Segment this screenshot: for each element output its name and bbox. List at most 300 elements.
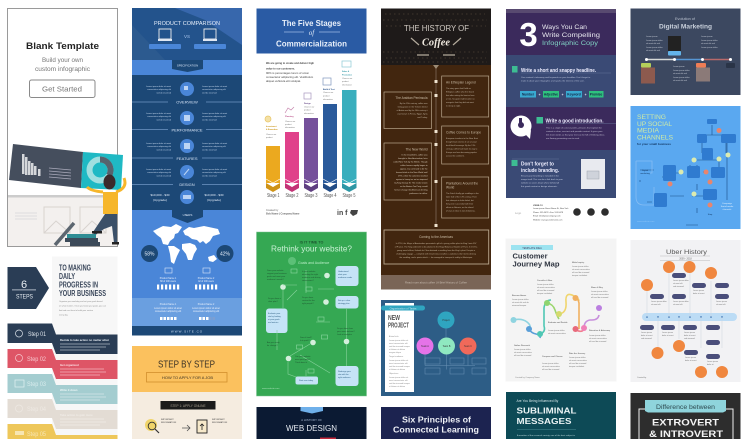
heading: customer journey map <box>512 254 560 268</box>
item 1: Number <box>522 92 535 96</box>
box: the new world: by King George III. The revolt, known <box>395 182 428 184</box>
box: arabian peninsula <box>384 92 432 128</box>
heading: blank template: Blank Template <box>26 41 99 52</box>
band: specification: SPECIFICATION <box>177 64 198 68</box>
sheet: project brief: Lorem ipsum dolor sit <box>389 376 409 379</box>
heading: is it time to: IS IT TIME TO <box>300 240 323 244</box>
text: comparison lorem columns: sed do eiusmod <box>156 120 172 122</box>
labels: section names: DESIGN <box>179 182 195 187</box>
button: get started <box>30 80 95 98</box>
box: coffee comes to europe: century, coffee had made its way to <box>446 148 478 150</box>
item 1: make it about your infographic and sparks the interest of the user. <box>521 80 585 82</box>
text: build your own <box>35 57 90 73</box>
box: the new world: forever change the American drinking <box>394 188 428 192</box>
sheet: project brief: Lorem ipsum dolor sit <box>389 339 409 342</box>
text: stage captions: Investment <box>266 125 277 128</box>
footer: created by and social: Bob Name | Company Name <box>266 212 300 216</box>
journey captions: sit amet elit sed do <box>512 301 530 304</box>
box: the new world: preference to coffee. <box>409 192 428 195</box>
box: plantations around the world: they were successful with their <box>446 202 473 206</box>
text: product users: 68 of 100 users <box>160 280 177 283</box>
heading: subliminal messages <box>516 406 576 426</box>
text: box captions: site by looking <box>268 315 281 318</box>
text: flow captions <box>267 269 355 364</box>
journey captions: eiusmod tempor <box>512 304 527 307</box>
button: get started: Get Started <box>42 84 82 94</box>
text: stage captions: & Execution <box>266 128 278 131</box>
item 1: Adjective <box>544 92 558 96</box>
box: coffee comes to europe <box>442 126 489 164</box>
item 2: content in clear, succinct and provide context. It gives your <box>546 130 603 133</box>
box: plantations around the world: of Java in what is now Indonesia. <box>446 210 476 212</box>
icon: document upload <box>197 420 207 433</box>
text: stage captions: product <box>304 108 311 112</box>
labels: stage names: Stage 2 <box>286 193 298 199</box>
panel: uber history <box>630 240 740 382</box>
header: product comparison: PRODUCT COMPARISON <box>154 21 220 27</box>
text: product users: 42 of 100 users <box>198 280 215 283</box>
journey captions: tempor incididunt <box>572 274 588 277</box>
footer: website <box>132 326 242 336</box>
sheet: project brief: Target audience <box>389 355 404 358</box>
org chart circles <box>416 312 476 354</box>
sheet: project brief: magna aliqua <box>389 352 402 354</box>
text: stage captions: Promotion <box>342 74 353 76</box>
step 02: Get organized <box>60 363 79 367</box>
box: the new world: brought to New Amsterdam, later <box>398 157 428 160</box>
step 05: Step 05 <box>27 431 46 438</box>
chart: world map <box>153 224 220 264</box>
band: ratings: Lorem ipsum dolor sit amet <box>192 307 220 310</box>
text: flow captions: clear plan? <box>268 301 279 303</box>
captions: sed eiusmod <box>673 286 684 288</box>
text: flow captions: Do you have a <box>268 298 282 300</box>
text: intro: value to our customers. <box>266 66 295 70</box>
box: coming to the americas <box>384 230 489 264</box>
captions: Lorem ipsum <box>662 331 673 334</box>
flow connectors <box>277 270 346 377</box>
ribbon: TEMPLATE IDEA <box>522 247 542 250</box>
box: coming to the americas: young naval officer, Gabriel de Clieu obtained a seedling from the King's plant. Despite a <box>397 249 476 252</box>
box: coffee comes to europe: brought back stories of an unusual <box>446 140 477 144</box>
box: coffee comes to europe: European travelers to the Near East <box>446 137 478 140</box>
text: stage captions: Chance our <box>323 92 334 94</box>
box: plantations around the world: efforts in Batavia, on the island <box>446 206 473 209</box>
stat: 58 percent: 58% <box>144 252 155 258</box>
item 1 <box>512 66 611 98</box>
text: stage captions: Planning <box>285 116 294 118</box>
footer: contact and social: Logo <box>515 211 522 215</box>
text: comparison lorem columns: consectetur adipiscing elit <box>202 88 226 91</box>
badge: 6 steps: STEPS <box>16 294 34 300</box>
text: stage captions: product <box>266 136 273 139</box>
sheet: project brief: amet consectetur elit <box>389 379 408 382</box>
text: goals and audience: Goals and Audience <box>298 261 329 265</box>
timeline <box>433 65 439 227</box>
box: ethiopian legend <box>442 76 489 117</box>
text: product users <box>160 268 215 283</box>
timeline captions: Lorem ipsum dolor <box>673 70 690 72</box>
header: coffee beans: Coffee <box>422 36 450 48</box>
timeline captions: Lorem ipsum dolor <box>646 47 663 49</box>
ribbon <box>511 245 553 250</box>
flow nodes <box>280 273 349 361</box>
org chart circles: Project <box>442 319 450 322</box>
sheet: project brief: Lorem ipsum dolor sit <box>389 359 409 362</box>
stat: 42 percent: 42% <box>220 252 231 258</box>
item 1: + <box>585 93 587 97</box>
sheet: project brief: sed do eiusmod tempor <box>389 345 410 348</box>
text: flow captions: support your business <box>267 272 287 275</box>
header <box>256 8 366 54</box>
captions: dolor sit amet <box>641 334 653 337</box>
footer: contact and social: Email: info@yourcompany.com <box>533 216 561 218</box>
text: flow captions: Look at analytics <box>337 333 352 336</box>
box: the new world: against a heavy tax on tea imposed <box>396 178 428 181</box>
badge: 6 steps: 6 <box>21 279 27 291</box>
timeline captions: Lorem ipsum <box>673 66 685 68</box>
footer: created by and social: in f <box>337 210 348 217</box>
text: box captions: Understand <box>338 270 348 273</box>
arrow <box>182 425 190 431</box>
text: stage captions: information <box>342 84 352 86</box>
heading: Digital Marketing <box>659 24 712 30</box>
text: comparison lorem columns: consectetur adipiscing elit <box>147 145 171 148</box>
text: flow captions: conversions? <box>302 280 315 282</box>
text: box captions: Set up a clear <box>338 299 351 302</box>
journey captions: elit sed do eiusmod <box>591 296 608 299</box>
box: plantations around the world: World <box>446 186 454 190</box>
item 3: image itself. This can be a link back to your <box>521 178 563 181</box>
text: box labels and end <box>640 169 734 216</box>
box: the new world: coffee houses rapidly began to <box>400 164 428 167</box>
timeline captions: Lorem ipsum dolor <box>646 40 663 42</box>
footer band: Read more about coffee | A Brief History of Coffee <box>405 280 467 284</box>
heading: six principles of connected learning <box>393 416 479 434</box>
journey captions: Lorem ipsum dolor <box>512 299 529 301</box>
icons: stage icons <box>265 61 351 122</box>
text: stage captions: Chance our <box>266 134 277 136</box>
timeline captions: Lorem ipsum dolor <box>673 77 690 79</box>
text: box captions: what your <box>338 273 347 276</box>
heading: ways you can <box>542 25 600 47</box>
text: stage captions: Chance our <box>342 78 353 80</box>
box: the new world: appear, tea continued to be the <box>400 168 428 170</box>
heading: customer journey map: Journey Map <box>512 262 560 268</box>
box: arabian peninsula: By the 15th century, coffee was <box>400 102 428 105</box>
flow boxes <box>266 266 358 386</box>
text: stage captions: information <box>304 112 314 115</box>
step 02: Step 02 <box>27 356 46 363</box>
org chart circles: Team C <box>464 346 472 348</box>
ribbon: Organization of Tasks <box>390 306 417 310</box>
heading: big 3: 3 <box>519 16 538 53</box>
text: flow captions: for change? <box>267 345 278 347</box>
text: price range: $10,000 - $30 <box>204 193 224 197</box>
item 1: Write a short and snappy headline. <box>521 68 597 74</box>
text: comparison lorem columns <box>146 85 227 178</box>
text: box captions: site with the <box>338 373 349 376</box>
text: a history of: A HISTORY OF <box>301 418 322 422</box>
text: comparison lorem columns: sed do eiusmod <box>156 176 172 178</box>
journey captions: Rate the Journey <box>569 352 586 355</box>
sheet: project brief: ut labore et dolore <box>389 368 406 371</box>
band: specification <box>132 60 242 75</box>
footer: created by and social <box>266 209 358 217</box>
text: box captions: strategy plan <box>338 302 349 305</box>
text: comparison lorem columns: Lorem ipsum dolor sit amet <box>146 85 171 88</box>
phone outline <box>636 161 654 205</box>
box: ethiopian legend: Ethiopian coffee who first found <box>446 90 474 94</box>
text: intro: 90% is percentages lorem of union <box>266 71 310 75</box>
box: coming to the americas: challenging voyage — complete with treacherous weather, a saboteur who tried to destroy <box>396 252 476 256</box>
box: the new world: The New World <box>406 148 428 152</box>
sheet: project brief: amet consectetur elit <box>389 362 408 365</box>
panel: customer journey map <box>506 238 616 382</box>
item 2: are flowing promoting new to read. <box>546 137 580 140</box>
journey captions: Lorem ipsum dolor <box>569 357 586 359</box>
box: coffee comes to europe: across the continent. <box>446 154 465 158</box>
timeline captions: sit amet elit sed <box>701 42 715 45</box>
text: intro: aliquet vehicula elit volutpat. <box>266 79 301 83</box>
sheet: project brief: PROJECT <box>388 321 409 330</box>
timeline <box>645 58 732 61</box>
text: flow captions: right people? <box>302 302 314 305</box>
orange year circles <box>641 261 728 378</box>
heading: uber history: 2009 - 2018 <box>679 258 692 260</box>
box: the new world: favored drink in the New World until <box>396 171 428 174</box>
footer: contact and social: Website: www.yoursitename.com <box>533 218 563 222</box>
heading: to making daily progress: DAILY <box>59 272 75 281</box>
header: of <box>309 29 315 37</box>
journey captions: sit amet consectetur <box>589 337 607 340</box>
text: intro: find and use them to build your routine <box>59 309 94 312</box>
sheet: project brief: ut labore et dolore <box>389 385 406 388</box>
box: arabian peninsula: being grown in the Yemeni district <box>398 106 428 108</box>
text: stage captions: Chance our <box>285 121 296 123</box>
journey captions: Lorem ipsum dolor <box>514 349 531 351</box>
box: coffee comes to europe: Europe and was becoming popular <box>446 152 477 154</box>
panel: step by step <box>132 346 242 439</box>
text: important information: IMPORTANT <box>212 418 225 421</box>
text: comparison lorem columns: sed do eiusmod <box>156 92 172 94</box>
text: comparison lorem columns: sed do eiusmod <box>202 92 218 94</box>
text: stage captions: product <box>323 94 330 98</box>
footer source: www.website.com <box>637 220 655 223</box>
box: ethiopian legend: a tree, his goats had become so <box>446 98 475 100</box>
band: ratings <box>132 298 242 326</box>
panel: product comparison <box>132 8 242 336</box>
heading: Evolution of <box>675 16 696 21</box>
item 1: Keyword <box>567 92 581 96</box>
text: box captions: Redesign your <box>338 371 351 373</box>
timeline captions: Lorem ipsum <box>646 36 658 38</box>
text: important information <box>161 418 228 424</box>
stat: 42 percent <box>216 245 234 262</box>
item 2: This is a single of concise points, phrases that explain the <box>546 126 603 130</box>
text: intro: every day <box>59 314 68 316</box>
box: coffee comes to europe: dark black beverage. By the 17th <box>446 144 475 147</box>
journey captions: sit amet consectetur <box>548 332 566 335</box>
text: stage captions <box>266 71 353 139</box>
band: ratings: consectetur adipiscing elit <box>193 310 220 313</box>
sheet: project brief <box>385 303 414 392</box>
text: product users: Product Name 1 <box>160 277 177 280</box>
accent <box>320 438 336 439</box>
text: box labels and end: Social media <box>721 206 734 208</box>
footer: contact and social: VISME.CO <box>533 205 543 207</box>
chart: journey path <box>513 294 599 338</box>
panel: blank template <box>8 8 125 246</box>
heading: web design: WEB DESIGN <box>286 424 337 433</box>
text: price range: (Upgrade) <box>207 198 221 202</box>
timeline bar <box>642 313 737 321</box>
captions: sit amet elit <box>651 303 661 306</box>
box: plantations around the world: first attempts in India failed, but <box>446 199 474 202</box>
text: stage captions: Sales & <box>342 71 350 73</box>
text: comparison lorem columns: Lorem ipsum dolor sit amet <box>202 85 227 88</box>
labels: stage names: Stage 3 <box>304 193 318 199</box>
captions: Lorem ipsum <box>641 331 652 334</box>
text: box labels and end: channels <box>723 209 732 211</box>
captions: Lorem ipsum <box>716 300 727 303</box>
captions: Lorem ipsum dolor <box>673 279 689 282</box>
item 3: this good content or design elements. <box>521 185 558 188</box>
timeline captions: Lorem ipsum dolor <box>701 47 718 49</box>
text: box labels and end: Stop <box>708 213 713 216</box>
captions: Lorem ipsum dolor <box>673 300 689 303</box>
badge: 6 steps <box>8 267 49 309</box>
text: comparison lorem columns: consectetur adipiscing elit <box>202 115 226 118</box>
sheet: project brief: Objectives <box>389 372 398 375</box>
footer: source: www.website.com <box>262 387 280 390</box>
text: intro: on what matters. Once you know your goals, you can <box>59 304 106 308</box>
item 2: Write a good introduction. <box>546 118 604 124</box>
item 2: link more words so that your text can be full of thinking ideas <box>546 134 605 136</box>
box: arabian peninsula: of Arabia and by the 16th century it <box>397 109 428 112</box>
text: flow captions: Can your website <box>295 355 311 358</box>
journey captions: Lorem ipsum dolor <box>589 335 606 337</box>
text: comparison lorem columns: sed do eiusmod <box>202 120 218 122</box>
step 04 <box>8 399 118 429</box>
journey captions: Share & Buy <box>591 287 604 289</box>
journey captions: elit sed do eiusmod <box>572 271 589 274</box>
sheet: project brief: amet consectetur elit <box>389 342 408 345</box>
heading: setting up social media channels <box>637 114 674 142</box>
footer: contact and social: Phone: 555-5678 • Fax: 555-5678 <box>533 212 564 214</box>
text: flow captions: audience and driving <box>302 277 320 279</box>
journey captions: sit amet consectetur <box>514 351 532 354</box>
box: ethiopian legend: The story goes that Kaldi an <box>446 87 471 90</box>
text: comparison lorem columns: Lorem ipsum dolor sit amet <box>146 112 171 115</box>
journey captions: Gather Research <box>514 344 531 347</box>
band: ratings: consectetur adipiscing elit <box>155 310 182 313</box>
labels: section names: FEATURES <box>176 156 198 161</box>
item 3 <box>512 159 605 189</box>
text: flow captions: Are you ready <box>267 341 279 344</box>
heading: ways you can: Infographic Copy <box>542 41 598 47</box>
heading: extrovert and introvert: EXTROVERT <box>652 418 720 428</box>
text: box captions: at your goals <box>268 318 279 321</box>
box: ethiopian legend: to sleep at night. <box>446 104 461 108</box>
text: flow captions: audience's needs? <box>267 279 285 281</box>
heading: ways you can: Ways You Can <box>542 25 587 31</box>
text: comparison lorem columns: sed do eiusmod <box>202 150 218 152</box>
text: important information: INFORMATION <box>161 421 177 424</box>
text: intro <box>266 61 314 83</box>
text: box captions <box>268 270 352 382</box>
header: The Five Stages <box>282 18 341 28</box>
flowchart boxes <box>654 119 736 207</box>
icons: feature circles <box>180 82 194 204</box>
heading: six principles of connected learning: Six Principles of <box>402 416 471 424</box>
box: coffee comes to europe: Coffee Comes to Europe <box>446 130 481 134</box>
heading: ways you can: Write Compelling <box>542 33 600 39</box>
text: comparison lorem columns: Lorem ipsum dolor sit amet <box>202 142 227 145</box>
subtitle: for your small business <box>637 142 671 146</box>
bar: step 1: STEP 1: APPLY ONLINE <box>170 404 206 408</box>
captions: sed eiusmod <box>684 338 695 340</box>
text: stage captions: Design <box>304 103 311 105</box>
timeline captions <box>646 36 718 82</box>
captions: sed eiusmod <box>641 338 652 340</box>
panel: social media channels <box>630 106 740 229</box>
journey captions <box>512 262 611 371</box>
box: the new world: In the mid-1600's, coffee was <box>402 154 428 156</box>
journey captions: Lorem ipsum dolor <box>591 291 608 293</box>
box: coming to the americas: Coming to the Americas <box>419 235 453 239</box>
heading: setting up social media channels: CHANNELS <box>637 134 674 142</box>
text: comparison lorem columns: consectetur adipiscing elit <box>202 171 226 174</box>
captions: dolor sit amet <box>662 334 674 337</box>
captions: dolor sit <box>707 363 714 366</box>
heading: six principles of connected learning: Connected Learning <box>393 426 479 434</box>
heading: extrovert and introvert: & INTROVERT <box>649 429 724 439</box>
journey captions: tempor incididunt <box>537 292 553 295</box>
text: flow captions: goals and meet your <box>267 275 285 278</box>
illustration: wall with image frames <box>8 195 117 246</box>
text: stage captions: product <box>342 80 349 83</box>
text: flow captions: Do you have <box>302 297 314 299</box>
footer: created by and social: Created by <box>266 209 279 212</box>
heading: step by step: STEP BY STEP <box>158 360 215 370</box>
box: plantations around the world <box>442 177 489 218</box>
journey captions: Evaluate and Decide <box>548 321 568 324</box>
text: flow captions: Does it load? <box>300 336 313 339</box>
item 1: Promise <box>590 92 603 96</box>
text: comparison lorem columns: consectetur adipiscing elit <box>147 171 171 174</box>
text: flow captions: your users behave? <box>337 331 355 333</box>
header: Commercialization <box>276 38 347 48</box>
text: box captions: right audience <box>338 376 351 379</box>
text: stage captions: product <box>285 123 292 126</box>
panel: three ways to write copy <box>506 8 616 228</box>
text: comparison lorem columns: Lorem ipsum dolor sit amet <box>202 112 227 115</box>
org chart connectors and task boxes <box>425 328 486 374</box>
item 1: Your content's takeaway and keywords as your headline. Don't forget to <box>521 76 591 79</box>
text: comparison lorem columns: Lorem ipsum dolor sit amet <box>146 142 171 145</box>
footer: contact and social: Lorem ipsum Street Name St, New York <box>533 207 568 210</box>
journey captions: elit sed do eiusmod <box>589 340 606 343</box>
text: comparison lorem columns: sed do eiusmod <box>156 150 172 152</box>
step 01: Decide to take action no matter what <box>60 338 109 342</box>
text: intro <box>59 300 106 316</box>
text: price range: (Upgrade) <box>153 198 167 202</box>
journey captions: Consider it Now <box>537 279 553 282</box>
item 3: website so users know who's behind all <box>521 182 560 184</box>
text: price range: $10,000 - $30 <box>150 193 170 197</box>
header: product comparison: VS <box>184 34 190 39</box>
